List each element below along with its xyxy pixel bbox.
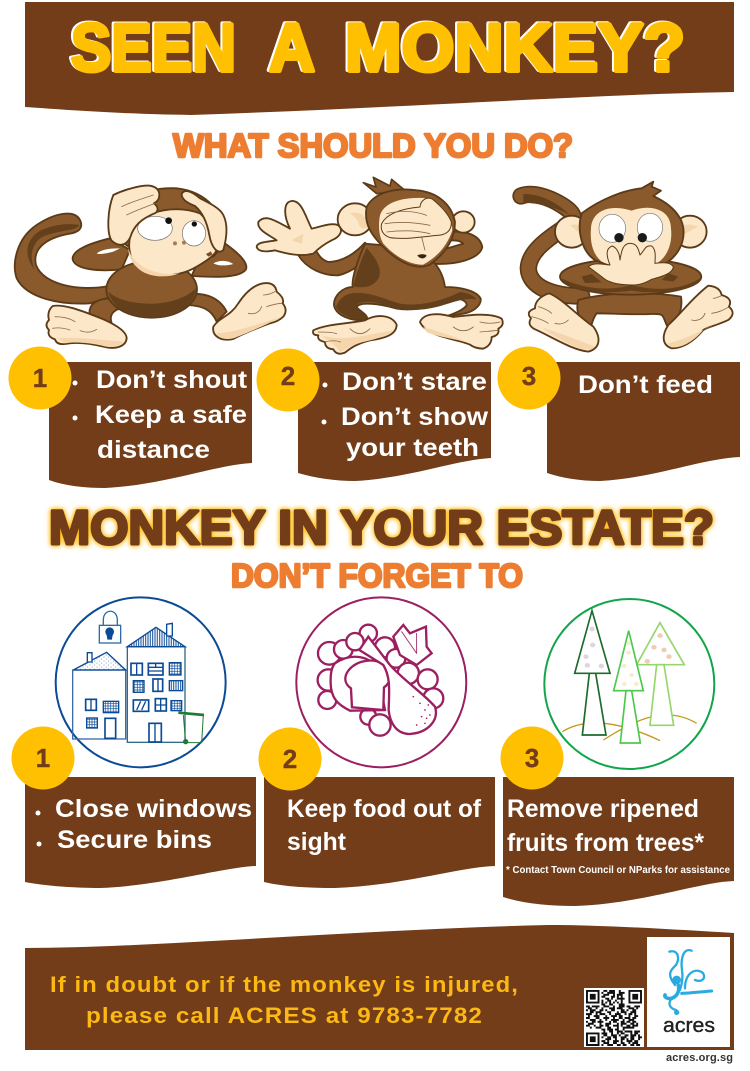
footer call text <box>50 972 519 1028</box>
text: Don’t feed <box>578 371 713 399</box>
panel: close windows <box>25 777 256 888</box>
panel: don't stare <box>298 362 491 481</box>
text <box>506 795 730 876</box>
heading: what should you do: WHAT SHOULD YOU DO? <box>173 127 573 164</box>
number badge 2: 2 <box>281 361 295 391</box>
title text <box>71 10 685 86</box>
bullets and text: Close windows <box>55 795 252 823</box>
number badge 3 <box>498 346 560 410</box>
heading: don't forget to: DON’T FORGET TO <box>231 557 523 594</box>
footer call text: If in doubt or if the monkey is injured, <box>50 972 519 997</box>
bullets and text: Don’t stare <box>342 368 487 396</box>
icon: trees in circle <box>544 599 714 769</box>
footer banner <box>25 925 734 1050</box>
monkey 3: hands over mouth <box>521 182 733 352</box>
bullets and text: Don’t show <box>341 403 489 431</box>
text: Remove ripened <box>507 795 699 823</box>
bullets and text <box>322 368 489 462</box>
icon: houses in circle <box>56 597 226 767</box>
icon: cyan monkey <box>665 950 712 1015</box>
monkey 1: hands on head <box>15 186 286 348</box>
number badge 1: 1 <box>33 363 47 393</box>
bullets and text <box>36 795 252 854</box>
text: fruits from trees* <box>507 829 704 857</box>
number badge 3: 3 <box>525 743 539 773</box>
QR code <box>584 988 644 1047</box>
footer call text: please call ACRES at 9783-7782 <box>86 1003 483 1028</box>
text: * Contact Town Council or NParks for assistance <box>506 864 730 876</box>
number badge 3: 3 <box>522 361 536 391</box>
number badge 1: 1 <box>36 743 50 773</box>
website url: acres.org.sg <box>666 1052 733 1064</box>
number badge 1 <box>12 726 74 790</box>
bullets and text: Keep a safe <box>95 401 247 429</box>
logo wordmark: acres <box>663 1015 715 1037</box>
bullets and text: your teeth <box>346 434 479 462</box>
bullets and text: distance <box>97 436 210 464</box>
text <box>287 795 482 856</box>
panel: keep food <box>264 777 495 888</box>
wheelie bin <box>178 713 204 744</box>
text: Keep food out of <box>287 795 482 823</box>
panel: don't shout <box>49 362 252 488</box>
title banner <box>25 2 734 115</box>
number badge 2 <box>258 728 322 790</box>
text: sight <box>287 828 347 856</box>
title text: A <box>269 10 315 86</box>
ACRES logo <box>647 937 730 1047</box>
title text: MONKEY? <box>345 10 685 86</box>
panel: don't feed <box>547 362 740 481</box>
panel: remove fruits <box>503 777 734 906</box>
bullets and text: Secure bins <box>57 826 212 854</box>
icon: food in circle <box>296 597 466 767</box>
monkey 2: hands over eyes <box>257 177 503 354</box>
bullets and text <box>72 366 248 464</box>
number badge 1 <box>8 346 72 410</box>
number badge 2: 2 <box>283 744 297 774</box>
heading: monkey in your estate: MONKEY IN YOUR ESTATE? <box>49 502 714 555</box>
number badge 3 <box>500 726 564 790</box>
bullets and text: Don’t shout <box>96 366 248 394</box>
title text: SEEN <box>71 10 236 86</box>
number badge 2 <box>256 348 320 412</box>
